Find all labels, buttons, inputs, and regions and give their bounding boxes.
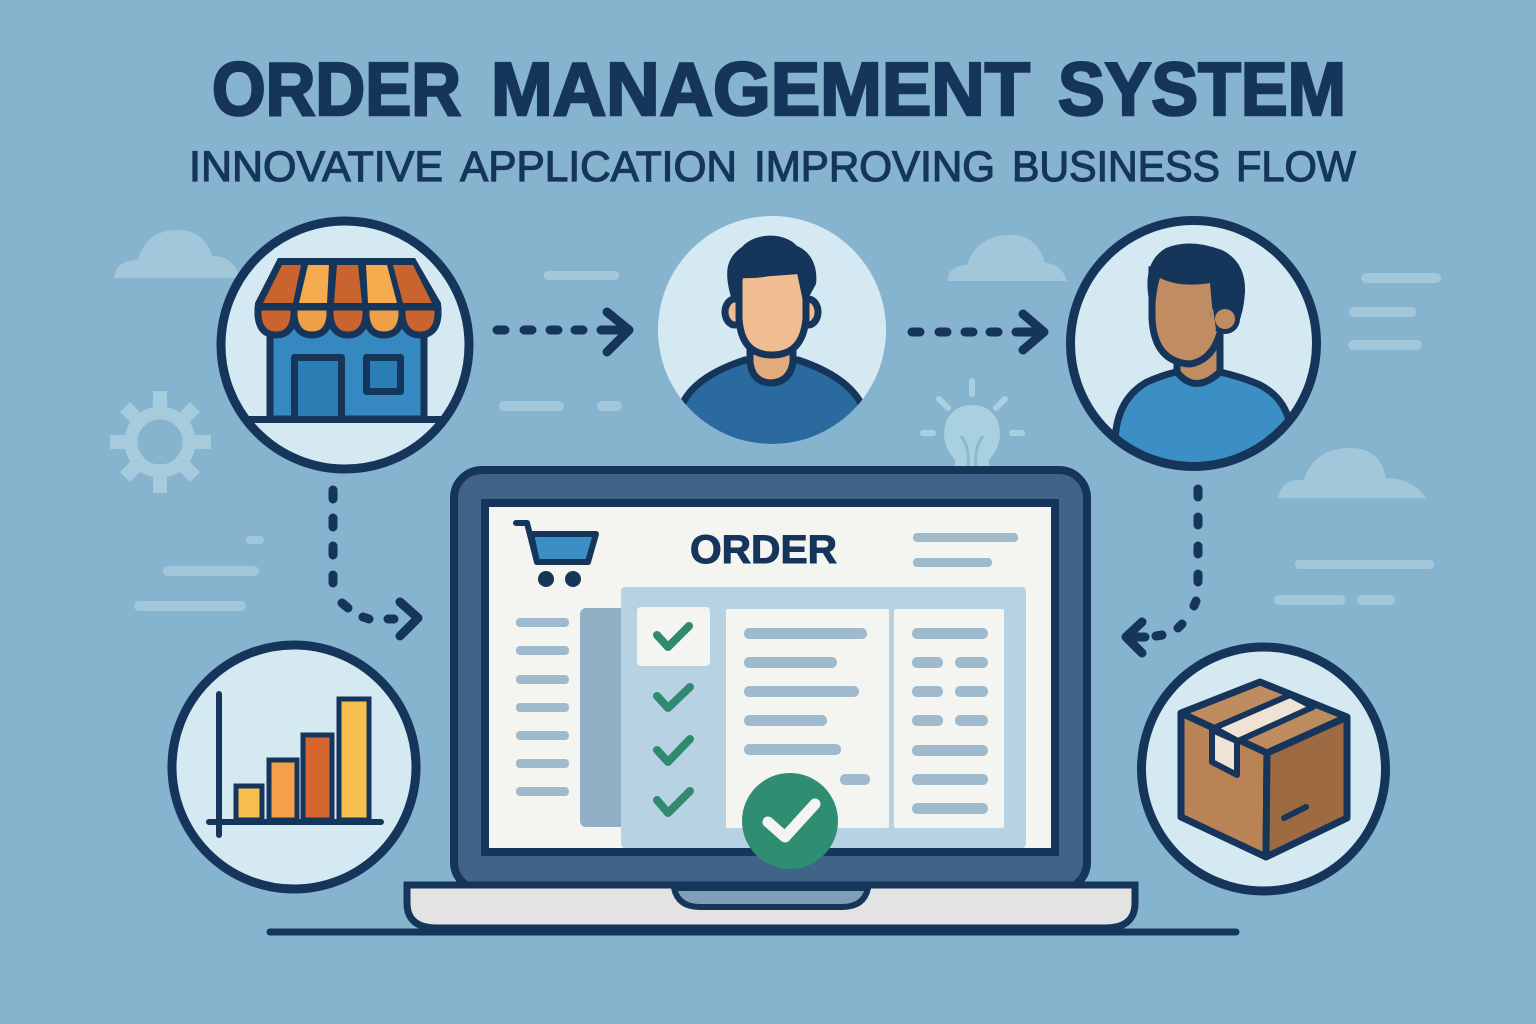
ground line (270, 928, 1236, 936)
title: SYSTEM (1058, 47, 1346, 131)
laptop notch (674, 888, 868, 907)
icon: gear (110, 391, 211, 493)
arrow: person 2 to laptop (1126, 489, 1198, 653)
subtitle: APPLICATION (460, 143, 737, 191)
icon: person light (658, 216, 886, 450)
order heading: ORDER (690, 528, 837, 572)
laptop screen (485, 503, 1055, 852)
icon: bar chart (172, 645, 416, 889)
subtitle (189, 143, 1356, 191)
subtitle: INNOVATIVE (189, 143, 443, 191)
icon: person dark (1070, 220, 1316, 480)
subtitle: FLOW (1236, 143, 1356, 191)
header lines (913, 533, 1018, 567)
laptop base (407, 885, 1135, 928)
title: MANAGEMENT (491, 47, 1030, 131)
background decorations (114, 230, 1441, 611)
icon: success badge (742, 773, 838, 869)
arrow: person 1 to person 2 (912, 314, 1044, 350)
arrow: store to person 1 (497, 312, 629, 352)
back panel (580, 608, 630, 827)
title (212, 47, 1346, 131)
arrow: store to laptop (333, 490, 418, 636)
order panel (621, 587, 1026, 848)
icon: store (221, 221, 469, 469)
title: ORDER (212, 47, 461, 131)
icon: package (1142, 647, 1386, 891)
laptop body (454, 470, 1087, 890)
subtitle: IMPROVING (754, 143, 995, 191)
laptop (270, 470, 1236, 932)
icon: cart (516, 523, 596, 587)
subtitle: BUSINESS (1012, 143, 1220, 191)
sidebar (516, 618, 569, 796)
icon: lightbulb (923, 381, 1022, 470)
